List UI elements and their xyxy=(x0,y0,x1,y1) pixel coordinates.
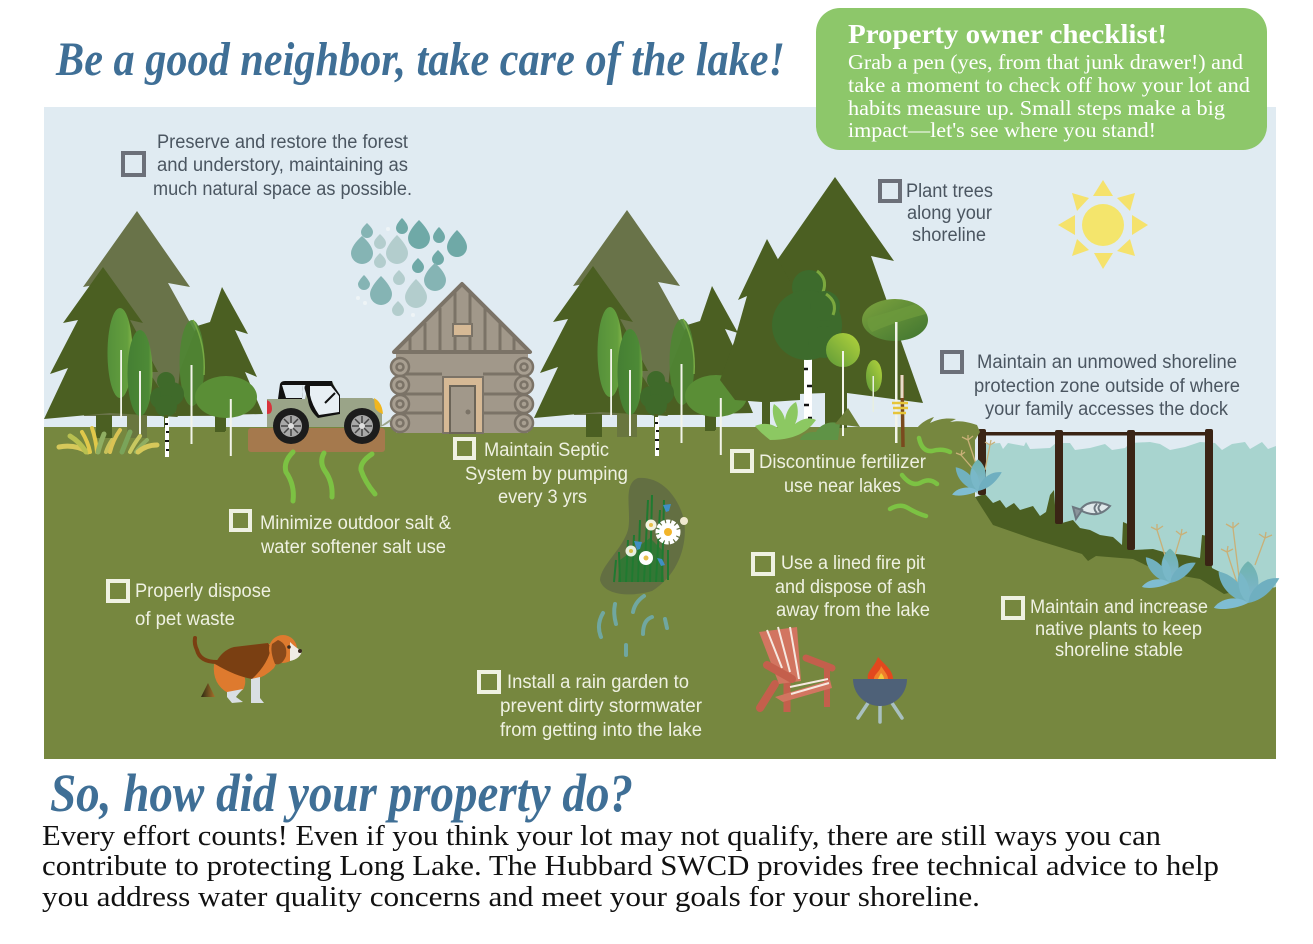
icon: adirondack chair xyxy=(759,627,832,712)
fertilizer runoff squiggles xyxy=(890,438,950,516)
icon: fire pit xyxy=(853,657,907,722)
grass tuft xyxy=(59,428,157,452)
checklist: rain garden: prevent dirty stormwater xyxy=(500,696,703,717)
callout: property owner checklist: Property owner checklist! xyxy=(848,19,1167,49)
checklist: septic xyxy=(455,439,628,508)
icon: rain drops xyxy=(351,218,467,317)
shoreline grass tuft xyxy=(917,417,980,440)
shoreline grass band xyxy=(975,490,1233,594)
runoff squiggles from driveway xyxy=(285,452,375,501)
checklist: unmowed shoreline: Maintain an unmowed shoreline xyxy=(977,352,1237,373)
checklist: rain garden xyxy=(479,672,703,741)
icon: dog xyxy=(195,635,302,703)
checklist: native plants: shoreline stable xyxy=(1055,640,1183,661)
icon: jeep on driveway xyxy=(248,381,392,452)
checklist: pet waste: of pet waste xyxy=(135,609,235,630)
callout: property owner checklist xyxy=(816,8,1267,150)
tall pine trees xyxy=(720,177,923,428)
closing paragraph xyxy=(42,821,1219,913)
fern and shrub xyxy=(755,402,860,440)
checklist: pet waste: Properly dispose xyxy=(135,581,271,602)
callout: property owner checklist: take a moment to check off how your lot and xyxy=(848,73,1251,97)
checklist: rain garden: Install a rain garden to xyxy=(507,672,689,693)
shoreline trees xyxy=(772,270,928,447)
checklist: plant trees: Plant trees xyxy=(906,181,993,202)
checklist: salt: Minimize outdoor salt & xyxy=(260,513,451,534)
checklist: salt xyxy=(231,511,451,558)
checklist: preserve forest: and understory, maintaining as xyxy=(157,155,408,176)
checklist: native plants: native plants to keep xyxy=(1035,619,1202,640)
checklist: plant trees: along your xyxy=(907,203,993,224)
rain garden water drops xyxy=(599,596,667,655)
left forest xyxy=(44,211,263,457)
callout: property owner checklist: Grab a pen (yes, from that junk drawer!) and xyxy=(848,50,1244,74)
scene panel xyxy=(44,107,1276,759)
native plants xyxy=(952,435,1279,609)
heading: how did your property do: So, how did your property do? xyxy=(50,763,633,823)
closing paragraph: Every effort counts! Even if you think your lot may not qualify, there are still ways you can xyxy=(42,821,1161,852)
closing paragraph: you address water quality concerns and meet your goals for your shoreline. xyxy=(42,882,980,913)
checklist: salt: water softener salt use xyxy=(260,537,446,558)
checklist: preserve forest xyxy=(123,132,412,200)
checklist: fire pit: and dispose of ash xyxy=(775,577,926,598)
checklist: fertilizer: use near lakes xyxy=(784,476,901,497)
checklist: septic: System by pumping xyxy=(465,464,628,485)
rain garden xyxy=(600,478,688,594)
checklist: plant trees xyxy=(880,181,993,246)
checklist: unmowed shoreline: protection zone outside of where xyxy=(974,376,1240,397)
lake xyxy=(975,442,1276,594)
checklist: fertilizer: Discontinue fertilizer xyxy=(759,452,927,473)
checklist: septic: every 3 yrs xyxy=(498,487,587,508)
closing paragraph: contribute to protecting Long Lake. The Hubbard SWCD provides free technical advice to help xyxy=(42,851,1219,882)
checklist: septic: Maintain Septic xyxy=(484,440,609,461)
checklist: native plants xyxy=(1003,597,1208,661)
icon: sun xyxy=(1058,180,1148,269)
callout: property owner checklist: impact—let's see where you stand! xyxy=(848,118,1156,142)
right forest xyxy=(534,210,753,456)
dock fence xyxy=(978,429,1213,566)
checklist: unmowed shoreline xyxy=(942,352,1240,420)
checklist: pet waste xyxy=(108,581,271,630)
checklist: native plants: Maintain and increase xyxy=(1030,597,1208,618)
checklist: plant trees: shoreline xyxy=(912,225,986,246)
icon: log cabin xyxy=(391,284,533,433)
checklist: fire pit: away from the lake xyxy=(776,600,930,621)
checklist: rain garden: from getting into the lake xyxy=(500,720,702,741)
checklist: unmowed shoreline: your family accesses the dock xyxy=(985,399,1228,420)
checklist: preserve forest: much natural space as possible. xyxy=(153,179,412,200)
checklist: fire pit xyxy=(753,553,930,621)
title: Be a good neighbor, take care of the lake! xyxy=(55,33,785,86)
checklist: fire pit: Use a lined fire pit xyxy=(781,553,926,574)
callout: property owner checklist: habits measure up. Small steps make a big xyxy=(848,96,1226,120)
icon: fish xyxy=(1073,502,1110,519)
checklist: preserve forest: Preserve and restore the forest xyxy=(157,132,409,153)
checklist: fertilizer xyxy=(732,451,927,497)
